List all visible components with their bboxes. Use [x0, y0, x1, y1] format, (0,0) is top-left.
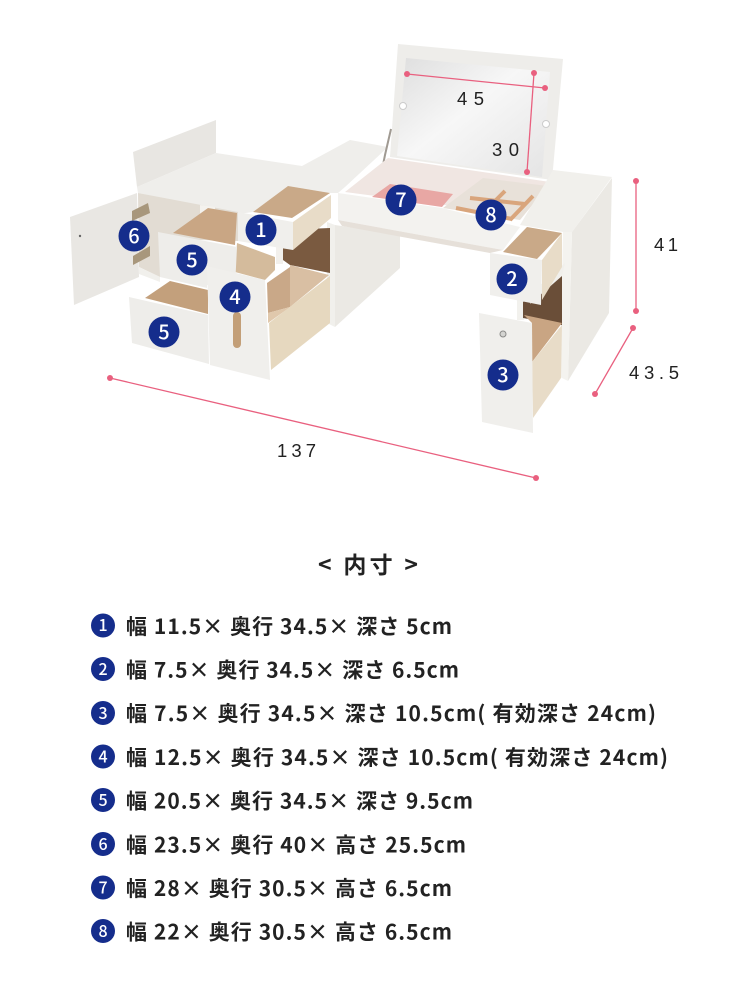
- drawer 2: [490, 227, 562, 305]
- badge 8: 8: [485, 199, 497, 228]
- badge 2: [496, 263, 528, 294]
- badge 2: 2: [506, 263, 518, 292]
- vanity tray with compartments: [338, 158, 550, 253]
- dimension: width 137: [107, 375, 539, 481]
- badge 1: [246, 214, 276, 246]
- badge 5 lower: 5: [158, 316, 170, 345]
- badge 5 upper: [176, 244, 208, 276]
- row 5: 5: [98, 787, 108, 811]
- dimension lines: [107, 70, 639, 481]
- row 5: 幅 20.5× 奥行 34.5× 深さ 9.5cm: [126, 786, 473, 816]
- badge 4: 4: [229, 281, 241, 310]
- row 6: 6: [98, 831, 108, 855]
- row 7: 幅 28× 奥行 30.5× 高さ 6.5cm: [126, 873, 452, 903]
- heading: < 内寸 >: [318, 546, 418, 580]
- badge 7: [386, 184, 416, 216]
- label 41: 41: [654, 234, 678, 255]
- row 1: 幅 11.5× 奥行 34.5× 深さ 5cm: [126, 611, 452, 641]
- dimension: mirror 30: [524, 70, 537, 175]
- drawer 5 lower: [129, 281, 209, 364]
- row 2: 2: [98, 656, 108, 680]
- row 6: 幅 23.5× 奥行 40× 高さ 25.5cm: [126, 830, 466, 860]
- badge 5 upper: 5: [186, 244, 198, 273]
- badge 8: [476, 199, 506, 230]
- drawer 5 upper: [158, 208, 237, 288]
- dimension: depth 43.5: [592, 325, 636, 397]
- label 30: 30: [492, 139, 519, 160]
- left cabinet unit: [133, 120, 400, 327]
- row 8: 幅 22× 奥行 30.5× 高さ 6.5cm: [126, 916, 452, 946]
- row 8: 8: [98, 918, 108, 942]
- label 45: 45: [457, 88, 484, 109]
- badge 6: 6: [128, 220, 140, 249]
- cabinet door with hinges: [70, 193, 150, 305]
- inner dimensions list: [91, 611, 668, 946]
- badge 3: 3: [497, 359, 509, 388]
- badge 5 lower: [148, 316, 180, 348]
- badge 6: [118, 220, 150, 252]
- label 43.5: 43.5: [629, 362, 679, 383]
- drawer 3: [479, 313, 562, 433]
- dimension: height 41: [633, 178, 639, 314]
- badge 3: [488, 359, 518, 390]
- label 137: 137: [277, 440, 316, 461]
- right cabinet unit: [517, 170, 612, 381]
- row 3: 3: [98, 700, 108, 724]
- row 1: 1: [98, 612, 108, 636]
- drawer 1: [238, 186, 331, 250]
- row 4: 4: [98, 744, 108, 768]
- photo number badges: [118, 184, 528, 390]
- badge 1: 1: [255, 214, 267, 243]
- row 4: 幅 12.5× 奥行 34.5× 深さ 10.5cm( 有効深さ 24cm): [126, 742, 668, 772]
- product photo: vanity desk with open drawers: [70, 44, 612, 433]
- drawer 4: [207, 265, 330, 380]
- row 7: 7: [98, 874, 108, 898]
- row 3: 幅 7.5× 奥行 34.5× 深さ 10.5cm( 有効深さ 24cm): [126, 698, 656, 728]
- vanity top and mirror: [381, 44, 563, 180]
- dimension: mirror 45: [404, 71, 548, 91]
- row 2: 幅 7.5× 奥行 34.5× 深さ 6.5cm: [126, 654, 459, 684]
- badge 7: 7: [395, 184, 407, 213]
- badge 4: [220, 281, 250, 312]
